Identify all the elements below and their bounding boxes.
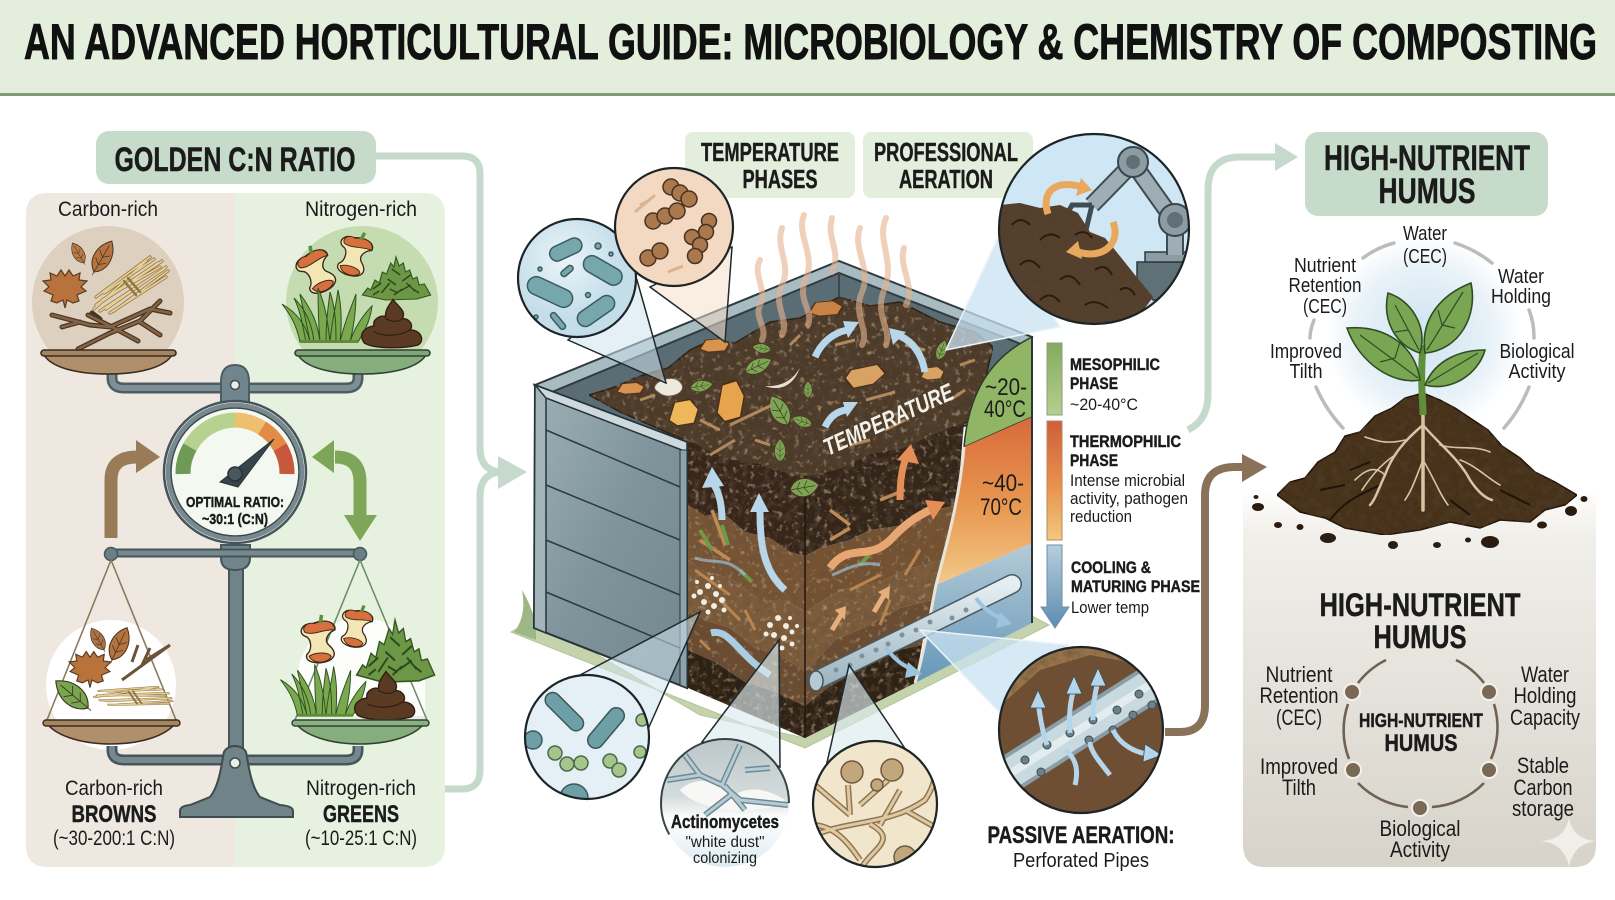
label: actinomycetes: "white dust" xyxy=(686,834,764,851)
labels: plant properties: (CEC) xyxy=(1403,246,1447,268)
thermophilic phase: THERMOPHILIC xyxy=(1070,432,1181,451)
top scale beam xyxy=(112,374,358,388)
legend: temperature phases xyxy=(1041,343,1200,628)
labels: plant properties: (CEC) xyxy=(1303,296,1347,318)
subheading: high-nutrient humus: HIGH-NUTRIENT xyxy=(1320,587,1521,623)
labels: ring properties: storage xyxy=(1512,796,1574,821)
magnifier: actinomycetes xyxy=(661,739,789,867)
icon: humus mound xyxy=(1252,393,1588,549)
magnifier: bacilli xyxy=(518,219,636,337)
magnifier: robotic turning arm xyxy=(990,134,1191,330)
temperature labels: ~40- xyxy=(982,470,1024,497)
header band xyxy=(0,0,1615,96)
lower beam xyxy=(104,548,366,560)
temperature labels: 40°C xyxy=(984,396,1026,423)
labels: ring properties: Retention xyxy=(1260,683,1338,708)
temperature labels: 70°C xyxy=(980,494,1022,521)
icon: seedling xyxy=(1347,283,1485,415)
label: nitrogen-rich top: Nitrogen-rich xyxy=(305,198,417,221)
callout cones xyxy=(568,233,1069,767)
temperature band xyxy=(915,337,1032,683)
plant glow xyxy=(1326,237,1522,433)
labels: plant properties xyxy=(1270,223,1574,383)
scale post xyxy=(221,545,250,765)
cooling and maturing phase: COOLING & xyxy=(1071,558,1151,577)
icon: nitrogen materials xyxy=(282,226,438,350)
interior back walls xyxy=(550,270,1030,470)
mesophilic phase xyxy=(1047,343,1160,415)
thermophilic phase: reduction xyxy=(1070,507,1132,526)
heading: professional aeration xyxy=(863,132,1033,198)
top plate: greens xyxy=(295,350,430,374)
thermophilic phase: activity, pathogen xyxy=(1070,489,1188,508)
airflow arrows xyxy=(702,321,945,675)
heading: temperature phases: TEMPERATURE xyxy=(701,137,839,167)
label: passive aeration: Perforated Pipes xyxy=(1013,850,1149,872)
panel: humus properties xyxy=(1243,223,1596,867)
labels: ring properties: Activity xyxy=(1390,837,1450,862)
gauge text xyxy=(186,494,284,528)
ground xyxy=(511,615,1049,748)
labels: plant properties: Retention xyxy=(1288,275,1362,297)
cooling and maturing phase: Lower temp xyxy=(1071,598,1149,617)
heading: professional aeration: AERATION xyxy=(899,164,993,194)
labels: plant properties: Biological xyxy=(1500,341,1574,363)
heading: high-nutrient humus xyxy=(1305,132,1548,216)
heading: golden C:N ratio: GOLDEN C:N RATIO xyxy=(114,141,356,179)
labels: ring properties: Improved xyxy=(1260,754,1338,779)
panel: golden C:N ratio xyxy=(26,131,445,867)
labels: ring properties: Stable xyxy=(1517,753,1569,778)
cooling and maturing phase: MATURING PHASE xyxy=(1071,577,1200,596)
label: greens: Nitrogen-rich xyxy=(306,777,416,800)
heading: temperature phases: PHASES xyxy=(742,164,818,194)
ring centre label xyxy=(1359,711,1483,757)
steam wisps xyxy=(758,215,909,345)
gauge xyxy=(164,401,306,543)
label: temperature on soil: TEMPERATURE xyxy=(819,379,959,461)
mesophilic phase: PHASE xyxy=(1070,374,1118,393)
label: greens: (~10-25:1 C:N) xyxy=(305,827,417,850)
label: browns xyxy=(53,777,175,850)
top plate: browns xyxy=(41,350,176,374)
heading: professional aeration: PROFESSIONAL xyxy=(874,137,1018,167)
temperature labels: ~20- xyxy=(985,374,1027,401)
bin front wall xyxy=(534,385,687,688)
gauge text: ~30:1 (C:N) xyxy=(202,511,268,528)
thermophilic phase xyxy=(1047,421,1188,540)
property ring xyxy=(1344,660,1498,816)
label: actinomycetes: colonizing xyxy=(693,850,757,867)
labels: ring properties: Biological xyxy=(1380,816,1460,841)
label: passive aeration: PASSIVE AERATION: xyxy=(988,822,1174,849)
label: actinomycetes: Actinomycetes xyxy=(671,812,779,832)
heading: high-nutrient humus: HUMUS xyxy=(1378,172,1476,211)
magnifier: pipe detail xyxy=(990,640,1170,813)
label: browns: (~30-200:1 C:N) xyxy=(53,827,175,850)
labels: ring properties: Holding xyxy=(1514,683,1576,708)
labels: ring properties: Nutrient xyxy=(1266,662,1332,687)
mesophilic phase: MESOPHILIC xyxy=(1070,355,1160,374)
labels: plant properties: Activity xyxy=(1508,361,1566,383)
mesophilic phase: ~20-40°C xyxy=(1070,395,1138,414)
gauge text: OPTIMAL RATIO: xyxy=(186,494,284,511)
heading: high-nutrient humus: HIGH-NUTRIENT xyxy=(1324,139,1530,178)
cooling and maturing phase xyxy=(1041,545,1200,628)
right soil face xyxy=(805,423,964,738)
labels: plant properties: Holding xyxy=(1491,286,1551,308)
labels: plant properties: Water xyxy=(1403,223,1447,245)
subheading: high-nutrient humus xyxy=(1320,587,1521,655)
labels: ring properties xyxy=(1260,662,1580,862)
labels: plant properties: Water xyxy=(1498,266,1544,288)
connector: bin to humus heading xyxy=(1188,143,1298,430)
label: browns: Carbon-rich xyxy=(65,777,163,800)
connector: golden ratio to bin xyxy=(376,156,527,789)
labels: ring properties: Carbon xyxy=(1514,775,1572,800)
labels: plant properties: Improved xyxy=(1270,341,1342,363)
property ring arcs xyxy=(1310,243,1534,428)
label: greens: GREENS xyxy=(323,801,399,828)
label: greens xyxy=(305,777,417,850)
hanging pan: browns xyxy=(43,560,180,750)
perforated pipe xyxy=(809,584,1012,691)
subheading: high-nutrient humus: HUMUS xyxy=(1374,619,1466,655)
labels: plant properties: Nutrient xyxy=(1294,255,1356,277)
left soil face xyxy=(688,442,805,738)
thermophilic phase: Intense microbial xyxy=(1070,471,1185,490)
arrow: gauge and greens xyxy=(312,440,377,541)
icon: carbon materials xyxy=(32,226,184,350)
magnifier: mixed bacteria xyxy=(524,675,649,812)
magnifier: cocci xyxy=(615,168,733,286)
labels: plant properties: Tilth xyxy=(1290,361,1322,383)
label: passive aeration xyxy=(988,822,1174,872)
icon: sparkle xyxy=(1541,818,1596,867)
heading: golden C:N ratio xyxy=(96,131,376,184)
connector: pipes to humus xyxy=(1165,454,1267,732)
labels: ring properties: Tilth xyxy=(1282,775,1316,800)
white dust colonies xyxy=(692,576,799,650)
labels: ring properties: Water xyxy=(1521,662,1569,687)
magnifier: fungal hyphae xyxy=(812,741,940,870)
compost debris xyxy=(617,301,975,650)
compost bin xyxy=(511,215,1049,748)
label: carbon-rich top: Carbon-rich xyxy=(58,198,158,221)
scale base xyxy=(112,746,358,817)
hanging pan: greens xyxy=(280,560,435,744)
labels: ring properties: (CEC) xyxy=(1276,705,1322,730)
heading: temperature phases xyxy=(685,132,855,198)
temperature labels xyxy=(980,374,1027,521)
labels: ring properties: Capacity xyxy=(1510,705,1580,730)
icon: roots xyxy=(1355,405,1500,510)
label: actinomycetes xyxy=(671,812,779,867)
label: browns: BROWNS xyxy=(72,801,156,828)
thermophilic phase: PHASE xyxy=(1070,451,1118,470)
ring centre label: HIGH-NUTRIENT xyxy=(1359,711,1483,732)
arrow: browns to gauge xyxy=(111,440,160,538)
ring centre label: HUMUS xyxy=(1384,730,1458,757)
soil top surface xyxy=(589,297,993,478)
